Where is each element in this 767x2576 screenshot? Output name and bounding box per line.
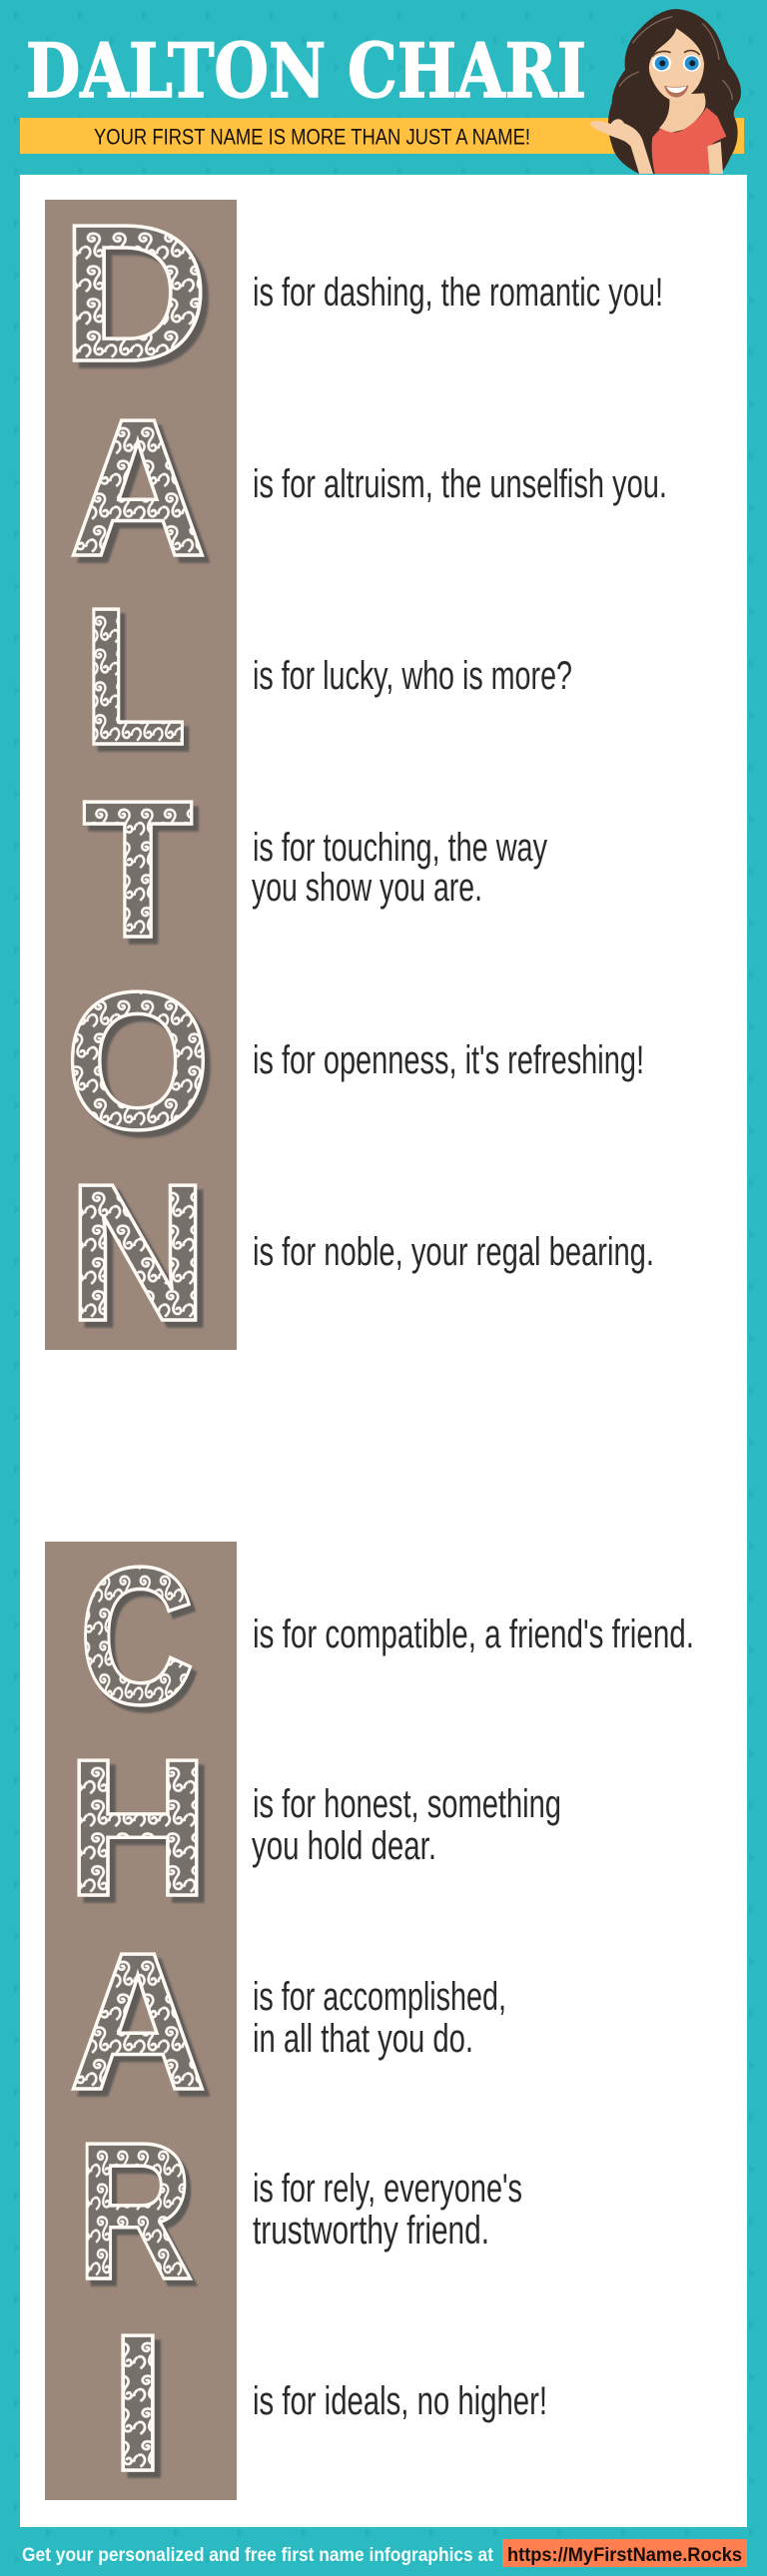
text: L line: is for lucky, who is more? <box>253 654 572 698</box>
footer url badge: https://MyFirstName.Rocks <box>507 2545 742 2566</box>
text: H line <box>252 1782 561 1868</box>
text: A line: is for accomplished, <box>253 1975 506 2019</box>
letter H: H <box>66 1718 210 1937</box>
description lines: DALTON <box>252 271 667 1274</box>
letter O: O <box>65 951 211 1170</box>
text: A line <box>253 1975 506 2061</box>
text: R line <box>253 2167 522 2253</box>
text: H line: you hold dear. <box>252 1824 436 1868</box>
letter A: A <box>69 378 207 597</box>
title: DALTON CHARI <box>26 27 586 115</box>
description lines: CHARI <box>252 1612 694 2423</box>
brown letter panel: CHARI <box>45 1527 237 2512</box>
letter R: R <box>76 2103 194 2320</box>
brown letter panel: DALTON <box>45 183 237 1362</box>
letter I: I <box>109 2292 167 2512</box>
text: T line <box>252 826 547 910</box>
text: T line: is for touching, the way <box>253 826 547 870</box>
letter N: N <box>67 1143 209 1362</box>
text: H line: is for honest, something <box>253 1782 561 1826</box>
subtitle banner <box>20 118 744 154</box>
letter A: A <box>69 1912 207 2131</box>
footer text: Get your personalized and free first name infographics at <box>22 2545 494 2566</box>
subtitle banner: YOUR FIRST NAME IS MORE THAN JUST A NAME! <box>94 124 530 150</box>
text: A line: in all that you do. <box>253 2017 473 2061</box>
text: R line: trustworthy friend. <box>253 2209 489 2253</box>
letter D: D <box>61 183 209 402</box>
text: R line: is for rely, everyone's <box>253 2167 522 2211</box>
letter L: L <box>82 568 188 786</box>
icon: cartoon woman mascot <box>589 9 741 174</box>
letter T: T <box>82 761 194 978</box>
letter C: C <box>79 1527 195 1745</box>
text: T line: you show you are. <box>252 866 482 910</box>
text: I line: is for ideals, no higher! <box>253 2379 547 2423</box>
